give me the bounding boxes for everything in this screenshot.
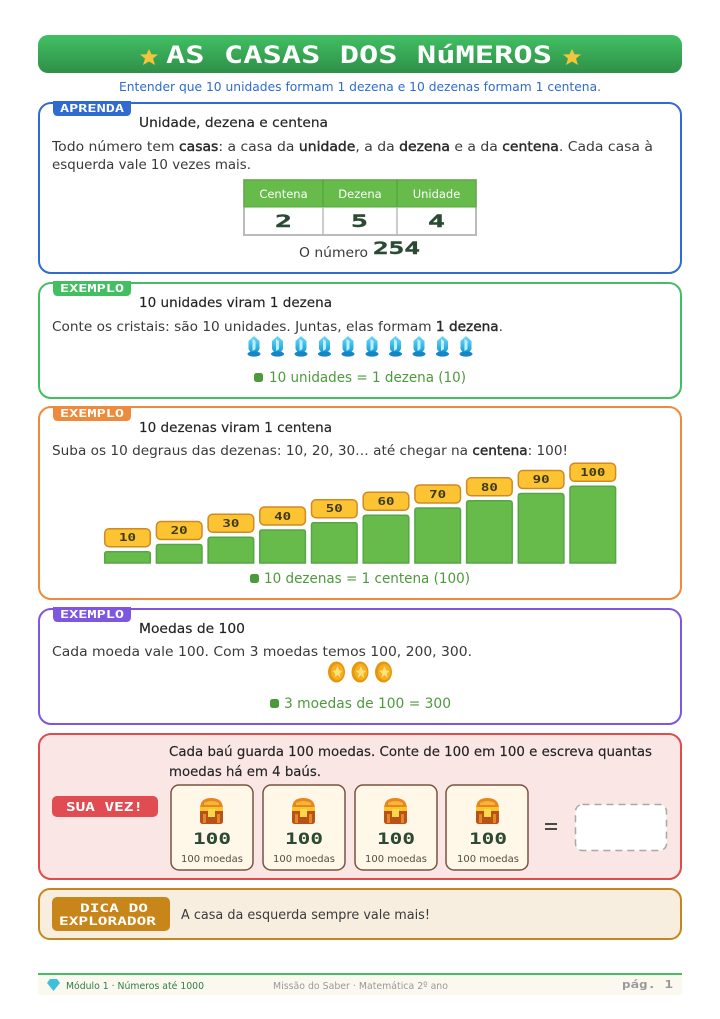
- card: chest 4: [446, 785, 528, 870]
- badge: sua vez: [52, 796, 158, 817]
- page number: pág. 1: [622, 978, 673, 991]
- place value table: [244, 180, 476, 235]
- bar chart: stairs: 90: [533, 473, 550, 486]
- summary: 10 dezenas = 1 centena (100): [264, 571, 470, 587]
- number caption: 254: [373, 239, 420, 259]
- place value table: 2: [275, 212, 292, 232]
- subtitle: Entender que 10 unidades formam 1 dezena e 10 dezenas formam 1 centena.: [119, 79, 601, 94]
- badge: exemplo: EXEMPLO: [60, 282, 125, 295]
- bar chart: stairs: [105, 463, 616, 563]
- panel: sua vez: [39, 734, 681, 879]
- heading: Moedas de 100: [139, 621, 245, 637]
- card: chest 1: 100 moedas: [181, 854, 243, 865]
- summary: 10 unidades = 1 dezena (10): [269, 370, 466, 386]
- badge: exemplo: EXEMPLO: [60, 407, 125, 420]
- panel: exemplo coins: [39, 607, 681, 724]
- number caption: O número: [299, 245, 368, 261]
- badge: dica: DICA DO: [80, 901, 148, 915]
- card: chest 4: 100 moedas: [457, 854, 519, 865]
- bar chart: stairs: 70: [429, 488, 446, 501]
- heading: Unidade, dezena e centena: [139, 115, 328, 131]
- badge: aprenda: APRENDA: [60, 102, 125, 115]
- badge: aprenda: [53, 101, 131, 116]
- card: chest 1: 100: [193, 829, 231, 848]
- panel: dica do explorador: [39, 889, 681, 939]
- card: chest 3: 100 moedas: [365, 854, 427, 865]
- text block: Suba os 10 degraus das dezenas: 10, 20, 30… até chegar na centena: 100!: [52, 443, 568, 459]
- bar chart: stairs: 50: [326, 502, 343, 515]
- bar chart: stairs: 100: [580, 466, 605, 479]
- card: chest 2: [263, 785, 345, 870]
- badge: exemplo: [53, 281, 131, 296]
- text block: Conte os cristais: são 10 unidades. Juntas, elas formam 1 dezena.: [52, 319, 503, 335]
- panel: exemplo stairs: [39, 406, 681, 599]
- card: chest 2: 100 moedas: [273, 854, 335, 865]
- text block: Todo número tem casas: a casa da unidade, a da dezena e a da centena. Cada casa à: [52, 139, 650, 155]
- panel: aprenda: [39, 101, 681, 273]
- card: chest 3: 100: [377, 829, 415, 848]
- bar chart: stairs: 10: [119, 531, 136, 544]
- place value table: Unidade: [413, 187, 460, 201]
- icon: star left: [140, 49, 158, 65]
- card: chest 3: [355, 785, 437, 870]
- icon: star right: [563, 49, 581, 65]
- question text: moedas há em 4 baús.: [169, 764, 321, 780]
- panel: exemplo crystals: [39, 281, 681, 398]
- card: chest 2: 100: [285, 829, 323, 848]
- equals sign: [545, 823, 557, 830]
- footer center: Missão do Saber · Matemática 2º ano: [273, 980, 448, 992]
- badge: dica: EXPLORADOR: [59, 914, 156, 928]
- badge: exemplo: EXEMPLO: [60, 608, 125, 621]
- question text: Cada baú guarda 100 moedas. Conte de 100 em 100 e escreva quantas: [169, 744, 652, 760]
- place value table: Centena: [259, 187, 308, 201]
- icon: gem: [47, 979, 60, 991]
- bar chart: stairs: 20: [171, 524, 188, 537]
- bar chart: stairs: 40: [274, 510, 291, 523]
- title: AS CASAS DOS NúMEROS: [166, 41, 552, 69]
- badge: exemplo: [53, 607, 131, 622]
- footer: [38, 973, 682, 995]
- card: chest 1: [171, 785, 253, 870]
- place value table: Dezena: [338, 187, 382, 201]
- bar chart: stairs: 60: [378, 495, 394, 508]
- answer box: [576, 804, 666, 850]
- icon row: coins: [328, 662, 392, 682]
- place value table: 4: [428, 212, 445, 232]
- text block: esquerda vale 10 vezes mais.: [52, 157, 251, 173]
- badge: exemplo: [53, 406, 131, 421]
- bar chart: stairs: 80: [481, 481, 498, 494]
- icon row: crystals: [248, 336, 472, 357]
- header banner: [38, 35, 682, 73]
- place value table: 5: [351, 212, 368, 232]
- module label: Módulo 1 · Números até 1000: [66, 980, 204, 992]
- heading: 10 unidades viram 1 dezena: [139, 295, 332, 311]
- number caption: [299, 239, 420, 261]
- card: chest 4: 100: [469, 829, 507, 848]
- text block: Cada moeda vale 100. Com 3 moedas temos 100, 200, 300.: [52, 644, 472, 660]
- heading: 10 dezenas viram 1 centena: [139, 420, 332, 436]
- summary: 3 moedas de 100 = 300: [284, 696, 451, 712]
- badge: dica: [52, 897, 170, 931]
- tip text: A casa da esquerda sempre vale mais!: [181, 907, 430, 923]
- badge: sua vez: SUA VEZ!: [66, 800, 143, 814]
- bar chart: stairs: 30: [222, 517, 239, 530]
